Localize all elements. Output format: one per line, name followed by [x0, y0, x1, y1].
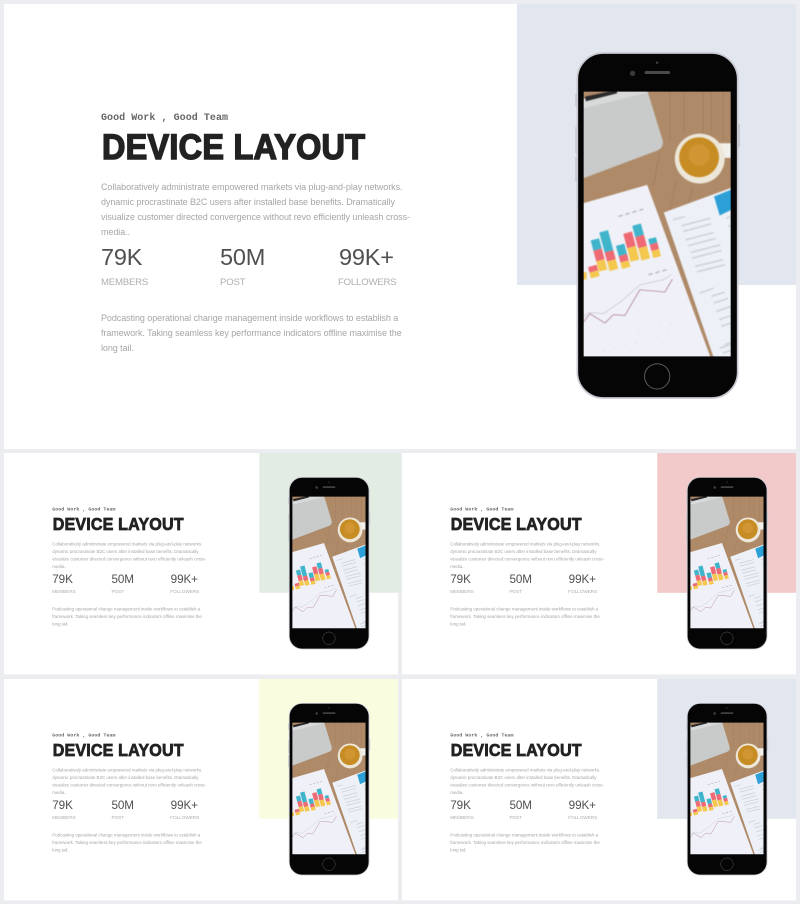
icon: smartphone with desk photo	[686, 477, 768, 650]
closing paragraph	[450, 833, 600, 853]
text block	[52, 507, 206, 627]
blue background block	[657, 679, 796, 819]
closing paragraph: framework. Taking seamless key performance indicators offline maximise the	[52, 614, 202, 619]
panel: yellow slide	[4, 679, 398, 900]
closing paragraph: long tail.	[52, 848, 69, 853]
intro paragraph: dynamic procrastinate B2C users after installed base benefits. Dramatically	[450, 775, 596, 780]
stat: post: 50M	[220, 244, 265, 270]
stat label: post: POST	[111, 815, 124, 820]
stat: followers: 99K+	[339, 244, 394, 270]
stat label: post: POST	[111, 589, 124, 594]
stat label: followers: FOLLOWERS	[568, 815, 597, 820]
stat: members: 79K	[52, 572, 73, 585]
stat: members: 79K	[52, 798, 73, 811]
intro paragraph: visualize customer directed convergence without revo efficiently unleash cross-	[450, 556, 604, 561]
wood grain	[653, 92, 723, 210]
earpiece and camera	[630, 61, 670, 76]
closing paragraph: long tail.	[450, 622, 467, 627]
intro paragraph	[52, 768, 206, 795]
closing paragraph	[52, 833, 202, 853]
heading: DEVICE LAYOUT	[53, 515, 184, 534]
stat: post: 50M	[111, 798, 134, 811]
stat label: post: POST	[220, 277, 245, 288]
stat label: members: MEMBERS	[450, 815, 474, 820]
intro paragraph: visualize customer directed convergence without revo efficiently unleash cross-	[450, 782, 604, 787]
intro paragraph: Collaboratively administrate empowered markets via plug-and-play networks.	[101, 182, 402, 192]
blue background block	[517, 4, 796, 285]
kicker: Good Work , Good Team	[450, 507, 513, 513]
phone side buttons	[575, 93, 740, 182]
kicker: Good Work , Good Team	[52, 733, 115, 739]
intro paragraph	[450, 542, 604, 569]
stat: post: 50M	[111, 572, 134, 585]
yellow background block	[259, 679, 398, 819]
screen photo	[292, 92, 764, 854]
home button	[645, 364, 670, 389]
heading: DEVICE LAYOUT	[451, 741, 582, 760]
intro paragraph: dynamic procrastinate B2C users after installed base benefits. Dramatically	[450, 549, 596, 554]
intro paragraph: visualize customer directed convergence without revo efficiently unleash cross-	[101, 212, 410, 222]
text block	[450, 507, 604, 627]
intro paragraph: media..	[450, 564, 465, 569]
closing paragraph	[450, 607, 600, 627]
closing paragraph: Podcasting operational change management inside workflows to establish a	[450, 833, 598, 838]
coffee cup	[716, 143, 733, 158]
stacked bars	[580, 224, 661, 279]
panel: large device layout slide	[4, 4, 796, 449]
stat label: members: MEMBERS	[450, 589, 474, 594]
intro paragraph: dynamic procrastinate B2C users after installed base benefits. Dramatically	[101, 197, 395, 207]
icon: smartphone with desk photo	[288, 703, 370, 876]
closing paragraph: Podcasting operational change management inside workflows to establish a	[101, 313, 398, 323]
stat label: followers: FOLLOWERS	[170, 589, 199, 594]
green background block	[259, 453, 401, 593]
intro paragraph	[52, 542, 206, 569]
stat: post: 50M	[509, 798, 532, 811]
stat label: followers: FOLLOWERS	[170, 815, 199, 820]
stat label: members: MEMBERS	[101, 277, 148, 288]
stat: post: 50M	[509, 572, 532, 585]
intro paragraph: media..	[52, 790, 67, 795]
kicker: Good Work , Good Team	[52, 507, 115, 513]
closing paragraph	[52, 607, 202, 627]
closing paragraph: framework. Taking seamless key performance indicators offline maximise the	[450, 614, 600, 619]
closing paragraph: framework. Taking seamless key performance indicators offline maximise the	[101, 328, 402, 338]
text block	[52, 733, 206, 853]
stat: followers: 99K+	[569, 572, 596, 585]
stat label: followers: FOLLOWERS	[338, 277, 396, 288]
intro paragraph: visualize customer directed convergence without revo efficiently unleash cross-	[52, 556, 206, 561]
text block	[450, 733, 604, 853]
pink background block	[657, 453, 796, 593]
intro paragraph: visualize customer directed convergence without revo efficiently unleash cross-	[52, 782, 206, 787]
intro paragraph: Collaboratively administrate empowered markets via plug-and-play networks.	[52, 542, 202, 547]
kicker: Good Work , Good Team	[450, 733, 513, 739]
line chart	[580, 209, 688, 351]
closing paragraph: framework. Taking seamless key performance indicators offline maximise the	[52, 840, 202, 845]
panel: pink slide	[402, 453, 796, 674]
intro paragraph: media..	[101, 227, 130, 237]
closing paragraph: Podcasting operational change management inside workflows to establish a	[52, 607, 200, 612]
heading: DEVICE LAYOUT	[53, 741, 184, 760]
closing paragraph: long tail.	[450, 848, 467, 853]
closing paragraph: Podcasting operational change management inside workflows to establish a	[52, 833, 200, 838]
panel: blue slide	[402, 679, 796, 900]
stat: followers: 99K+	[569, 798, 596, 811]
stat label: members: MEMBERS	[52, 589, 76, 594]
kicker: Good Work , Good Team	[101, 113, 228, 124]
stat label: post: POST	[509, 589, 522, 594]
text block	[101, 112, 410, 353]
intro paragraph: dynamic procrastinate B2C users after installed base benefits. Dramatically	[52, 775, 198, 780]
closing paragraph: long tail.	[52, 622, 69, 627]
icon: smartphone with desk photo	[686, 703, 768, 876]
intro paragraph: Collaboratively administrate empowered markets via plug-and-play networks.	[450, 542, 600, 547]
closing paragraph: long tail.	[101, 343, 134, 353]
phone body	[577, 53, 738, 398]
stat: members: 79K	[450, 798, 471, 811]
icon: smartphone with desk photo	[575, 52, 740, 399]
icon: smartphone with desk photo	[288, 477, 370, 650]
intro paragraph: Collaboratively administrate empowered markets via plug-and-play networks.	[52, 768, 202, 773]
stat: members: 79K	[450, 572, 471, 585]
closing paragraph: framework. Taking seamless key performance indicators offline maximise the	[450, 840, 600, 845]
intro paragraph: Collaboratively administrate empowered markets via plug-and-play networks.	[450, 768, 600, 773]
laptop	[580, 90, 663, 180]
stat label: followers: FOLLOWERS	[568, 589, 597, 594]
report sheet with charts	[580, 185, 711, 360]
intro paragraph: dynamic procrastinate B2C users after installed base benefits. Dramatically	[52, 549, 198, 554]
intro paragraph	[101, 182, 410, 237]
closing paragraph: Podcasting operational change management inside workflows to establish a	[450, 607, 598, 612]
heading: DEVICE LAYOUT	[102, 128, 365, 167]
intro paragraph: media..	[450, 790, 465, 795]
panel: green slide	[4, 453, 398, 674]
stat label: members: MEMBERS	[52, 815, 76, 820]
stat: followers: 99K+	[171, 572, 198, 585]
closing paragraph	[101, 313, 402, 353]
stat label: post: POST	[509, 815, 522, 820]
heading: DEVICE LAYOUT	[451, 515, 582, 534]
resume sheet	[664, 187, 735, 360]
intro paragraph	[450, 768, 604, 795]
stat: followers: 99K+	[171, 798, 198, 811]
intro paragraph: media..	[52, 564, 67, 569]
stat: members: 79K	[101, 244, 142, 270]
